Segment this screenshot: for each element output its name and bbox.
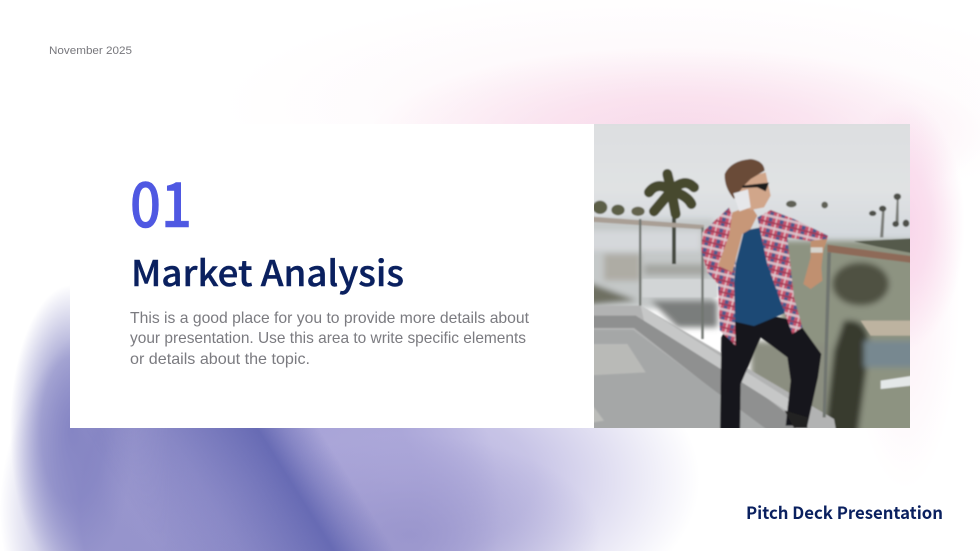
description text — [130, 310, 530, 368]
palm trees — [593, 174, 920, 264]
description text: This is a good place for you to provide more details about — [130, 310, 530, 327]
white content card — [70, 124, 594, 428]
man figure — [701, 159, 828, 437]
balcony railing and floor — [584, 216, 920, 437]
legs — [720, 314, 821, 437]
city below balcony — [594, 218, 910, 428]
phone — [733, 189, 751, 211]
description text: or details about the topic. — [130, 351, 310, 368]
dark diagonal band — [136, 428, 385, 551]
section number: 01 — [130, 155, 192, 245]
undershirt — [733, 226, 786, 327]
photo: man on phone at balcony — [594, 124, 910, 428]
date label: November 2025 — [49, 45, 132, 57]
description text: your presentation. Use this area to write specific elements — [130, 330, 526, 347]
sky and sea — [594, 124, 910, 277]
footer title: Pitch Deck Presentation — [746, 499, 943, 524]
plaid shirt — [701, 207, 738, 346]
head and hair — [739, 172, 771, 210]
slide content — [50, 46, 942, 519]
arms and hands — [718, 206, 757, 272]
section heading: Market Analysis — [131, 246, 404, 297]
